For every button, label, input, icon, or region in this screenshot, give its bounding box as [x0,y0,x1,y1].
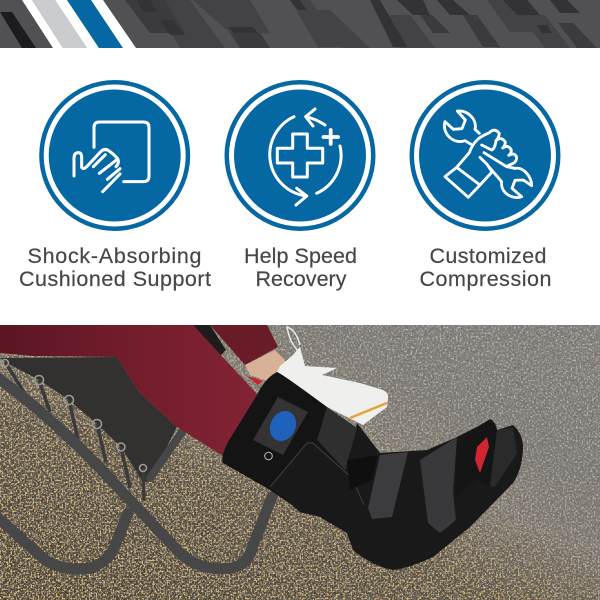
far leg legging [210,325,278,365]
header banner [0,0,600,48]
far leg skin [245,350,288,381]
label: customized compression: Customized [430,244,546,268]
icon: shock-absorbing hand on cushion [39,80,190,231]
black stripe [0,12,36,48]
chair fabric [0,357,177,482]
red sock [475,437,489,473]
forefoot strap [420,437,457,533]
floor [0,325,600,600]
inner liner [347,455,378,490]
grey stripe [32,0,87,48]
label: shock-absorbing cushioned support: Cushioned Support [19,267,211,291]
blue air pad [270,411,296,441]
white stripe [55,0,99,48]
icon: recovery cross and arrows [224,80,376,231]
label: customized compression [420,244,552,291]
black gap behind leg [193,325,226,356]
white sneaker [277,347,388,425]
label: shock-absorbing cushioned support: Shock-Absorbing [28,244,202,268]
label: help speed recovery [244,244,357,291]
label: customized compression: Compression [420,267,552,291]
boot shell and sole [270,419,523,570]
eyelet [265,452,272,460]
red sock edge [247,376,263,385]
icon: hand gripping wrench [410,80,560,231]
walking boot [222,372,523,570]
toe insole [490,428,517,487]
label: shock-absorbing cushioned support [19,244,211,291]
blue stripe [67,0,123,48]
white stripe [91,0,136,48]
ankle strap [317,407,357,470]
boot cuff [222,372,345,513]
chair cords and eyelets [2,360,146,500]
toe box [457,426,497,437]
sneaker lace loop [287,327,300,353]
near leg legging [0,325,258,456]
photo: person wearing walking boot on chair [0,325,600,600]
shell edge highlight [270,443,364,505]
label: help speed recovery: Help Speed [244,244,357,268]
midfoot strap [368,452,408,519]
chair frame [0,376,272,569]
pad backing [253,397,308,455]
label: help speed recovery: Recovery [256,267,347,291]
white stripe [22,0,63,48]
